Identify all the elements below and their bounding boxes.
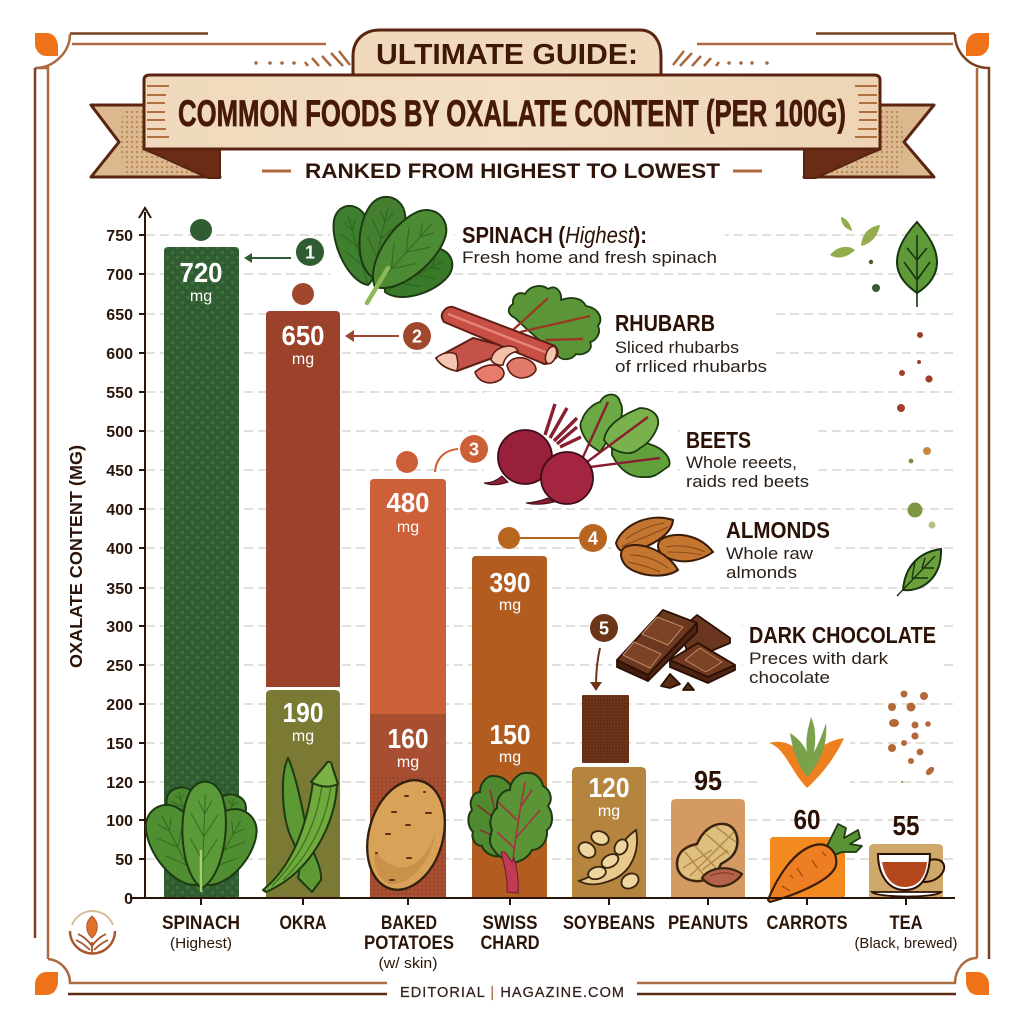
bar: spinach 720: 720: [180, 257, 222, 288]
icon: peanut: [677, 824, 742, 886]
x axis labels: [162, 913, 958, 972]
callout text: DARK CHOCOLATE: [749, 622, 936, 648]
x axis labels: (Highest): [170, 936, 232, 952]
callout 3: beets: [435, 394, 809, 504]
bar: swiss chard 390 and 150: 390: [490, 567, 530, 598]
y axis tick labels: 120: [106, 775, 133, 792]
x axis labels: POTATOES: [364, 933, 454, 954]
icon: swiss chard: [468, 773, 552, 893]
y axis tick labels: 450: [106, 463, 133, 480]
callout text: [749, 622, 936, 687]
callout 1: spinach: 1: [305, 242, 315, 262]
bar: swiss chard 390 and 150: [468, 527, 552, 898]
callout 2: rhubarb: 2: [412, 326, 422, 346]
hatch ornaments: [254, 51, 769, 66]
bar: tea 55: 55: [892, 810, 920, 841]
footer text: EDITORIAL | HAGAZINE.COM: [400, 985, 624, 1001]
y axis tick labels: 350: [106, 581, 133, 598]
x axis labels: CHARD: [480, 933, 540, 954]
x axis labels: TEA: [890, 913, 923, 934]
icon: okra: [263, 758, 338, 892]
y axis tick labels: 400: [106, 502, 133, 519]
icon: bottom left logo: [70, 911, 115, 954]
y axis tick labels: 150: [106, 736, 133, 753]
bar: soybeans 210 and 120: 120: [588, 772, 630, 803]
x axis labels: SWISS: [482, 913, 538, 934]
callout text: Sliced rhubarbs: [615, 339, 739, 357]
callout text: SPINACH (Highest):: [462, 222, 647, 248]
callout text: ALMONDS: [726, 517, 830, 543]
bar: baked potatoes 480 and 160: mg: [397, 519, 419, 536]
icon: soybeans: [576, 829, 641, 892]
callout 2: rhubarb: [345, 286, 767, 383]
bar: spinach 720: mg: [190, 288, 212, 305]
x axis labels: SPINACH: [162, 913, 240, 934]
x axis labels: SOYBEANS: [563, 913, 655, 934]
callout text: chocolate: [749, 669, 830, 687]
y axis tick labels: 500: [106, 424, 133, 441]
callout text: Preces with dark: [749, 650, 889, 668]
y axis tick labels: 550: [106, 385, 133, 402]
callout text: BEETS: [686, 427, 751, 453]
icon: lower leaf: [897, 549, 941, 596]
icon: green and orange sprig: [769, 717, 844, 788]
icon: almonds: [616, 518, 713, 576]
bar: peanuts 95: [671, 765, 745, 898]
icon: large leaf: [897, 222, 937, 307]
tab: ultimate guide: [353, 30, 661, 75]
bar: soybeans 210 and 120: mg: [598, 803, 620, 820]
bar: swiss chard 390 and 150: mg: [499, 749, 521, 766]
x axis: [130, 897, 955, 899]
y axis title: OXALATE CONTENT (MG): [66, 445, 86, 668]
x axis labels: OKRA: [280, 913, 327, 934]
y axis: [66, 208, 151, 908]
bar: baked potatoes 480 and 160: 160: [388, 723, 428, 754]
ribbon tails: [91, 105, 934, 178]
callout text: Whole reeets,: [686, 454, 797, 472]
bar: okra 650 and 190: mg: [292, 351, 314, 368]
subtitle: RANKED FROM HIGHEST TO LOWEST: [305, 159, 720, 183]
callout 3: beets: 3: [469, 440, 479, 460]
bar: spinach 720: [136, 219, 267, 898]
bar: baked potatoes 480 and 160: 480: [386, 487, 430, 518]
callout text: raids red beets: [686, 473, 809, 491]
callout text: [686, 427, 809, 491]
icon: rhubarb: [436, 286, 600, 383]
callout text: almonds: [726, 564, 797, 582]
callout 5: dark chocolate: [590, 610, 936, 691]
x axis labels: (Black, brewed): [854, 936, 958, 952]
text backing masks: [330, 195, 939, 792]
y axis tick labels: 200: [106, 697, 133, 714]
title block: [91, 30, 934, 183]
y axis tick labels: 50: [115, 852, 133, 869]
bar: okra 650 and 190: mg: [292, 728, 314, 745]
y axis tick labels: 400: [106, 541, 133, 558]
bar: baked potatoes 480 and 160: mg: [397, 754, 419, 771]
bar: okra 650 and 190: 190: [282, 697, 324, 728]
y axis tick labels: 600: [106, 346, 133, 363]
tab: ultimate guide: ULTIMATE GUIDE:: [376, 39, 638, 71]
y axis tick labels: 700: [106, 267, 133, 284]
callout text: Whole raw: [726, 545, 813, 563]
bar: swiss chard 390 and 150: mg: [499, 597, 521, 614]
x axis labels: CARROTS: [766, 913, 848, 934]
bar: okra 650 and 190: 650: [282, 320, 324, 351]
bar: okra 650 and 190: [263, 283, 340, 898]
decoration: right side leaves and dots: [830, 217, 941, 783]
icon: chocolate: [617, 610, 735, 690]
icon: spinach leaves: [327, 193, 460, 309]
bar: soybeans 210 and 120: [572, 695, 646, 898]
bar: tea 55: [869, 810, 944, 898]
callout text: RHUBARB: [615, 310, 715, 336]
y axis tick labels: 0: [124, 891, 133, 908]
bar: swiss chard 390 and 150: 150: [490, 719, 530, 750]
bar: peanuts 95: 95: [694, 765, 722, 796]
callout text: of rrliced rhubarbs: [615, 358, 767, 376]
callout 1: spinach: [244, 193, 717, 309]
x axis ticks: [201, 898, 906, 905]
chart grid lines: [146, 235, 955, 859]
bar: baked potatoes 480 and 160: [355, 451, 457, 899]
x axis labels: BAKED: [381, 913, 437, 934]
y axis tick labels: 100: [106, 813, 133, 830]
icon: beets: [484, 394, 670, 504]
callout text: [462, 222, 717, 267]
bar: carrots 60: 60: [794, 804, 820, 835]
icon: tea cup: [872, 854, 944, 896]
callout 4: almonds: [520, 517, 830, 582]
callout text: [726, 517, 830, 582]
y axis tick labels: 750: [106, 228, 133, 245]
y axis tick labels: 650: [106, 307, 133, 324]
y axis tick labels: 300: [106, 619, 133, 636]
callout 4: almonds: 4: [588, 528, 598, 548]
bar: carrots 60: [768, 804, 862, 902]
icon: potato: [355, 771, 457, 899]
y axis tick labels: 250: [106, 658, 133, 675]
callout text: [615, 310, 767, 376]
callout text: Fresh home and fresh spinach: [462, 249, 717, 267]
x axis labels: (w/ skin): [378, 956, 438, 972]
icon: carrot: [768, 824, 862, 902]
banner: [144, 75, 880, 149]
callout 5: dark chocolate: 5: [599, 618, 609, 638]
icon: spinach bunch: [136, 781, 267, 897]
y axis tick labels: [106, 228, 133, 908]
x axis labels: PEANUTS: [668, 913, 748, 934]
